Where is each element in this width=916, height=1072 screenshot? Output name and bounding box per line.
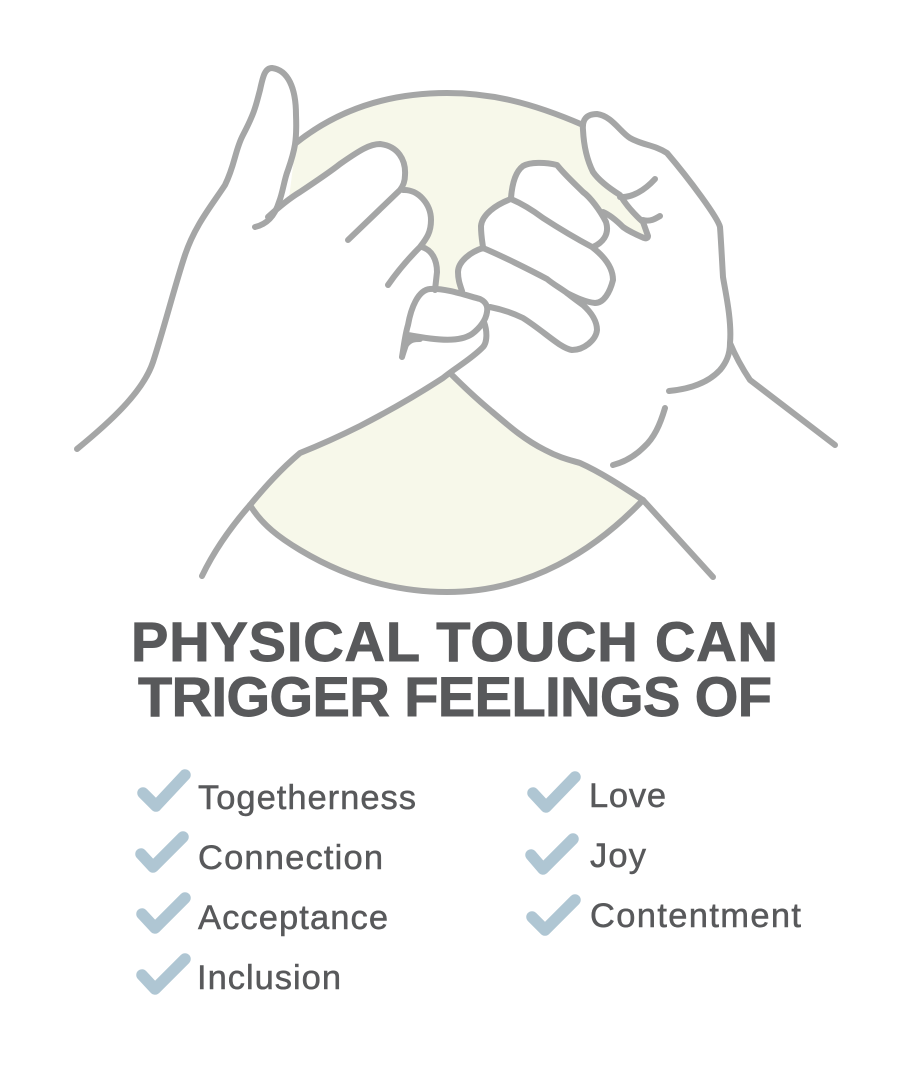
right wrist creases xyxy=(613,343,730,465)
right middle finger xyxy=(481,199,613,303)
title: PHYSICAL TOUCH CAN xyxy=(131,610,778,673)
left middle finger xyxy=(388,190,431,285)
right hand white fill xyxy=(452,114,835,577)
title: TRIGGER FEELINGS OF xyxy=(138,665,772,728)
item: Joy xyxy=(531,837,647,875)
item: Love: Love xyxy=(589,777,666,815)
left wrist and forearm xyxy=(202,322,486,576)
right index finger xyxy=(511,163,607,247)
left ring finger xyxy=(422,247,437,290)
right thumb and hand back xyxy=(583,114,835,445)
cream circle background xyxy=(250,92,700,592)
item: Connection: Connection xyxy=(198,839,383,877)
item: Acceptance: Acceptance xyxy=(198,899,388,937)
item: Togetherness: Togetherness xyxy=(198,779,416,817)
left pinky xyxy=(402,289,487,357)
right wrist and forearm xyxy=(452,375,713,577)
bottom arc of circle xyxy=(250,500,643,592)
right thumb creases xyxy=(620,179,660,221)
list: left column xyxy=(141,775,416,997)
left hand white fill xyxy=(60,68,487,576)
item: Love xyxy=(533,777,666,815)
item: Inclusion: Inclusion xyxy=(197,959,341,997)
item: Contentment: Contentment xyxy=(590,897,801,935)
left index finger xyxy=(268,144,405,240)
title xyxy=(131,610,778,728)
top arc of circle xyxy=(296,93,583,143)
right ring finger xyxy=(458,248,597,350)
item: Joy: Joy xyxy=(590,837,647,875)
illustration: two hands with linked pinkies xyxy=(60,68,835,592)
left arm and thumb outline xyxy=(77,68,296,449)
list: right column xyxy=(531,777,801,935)
